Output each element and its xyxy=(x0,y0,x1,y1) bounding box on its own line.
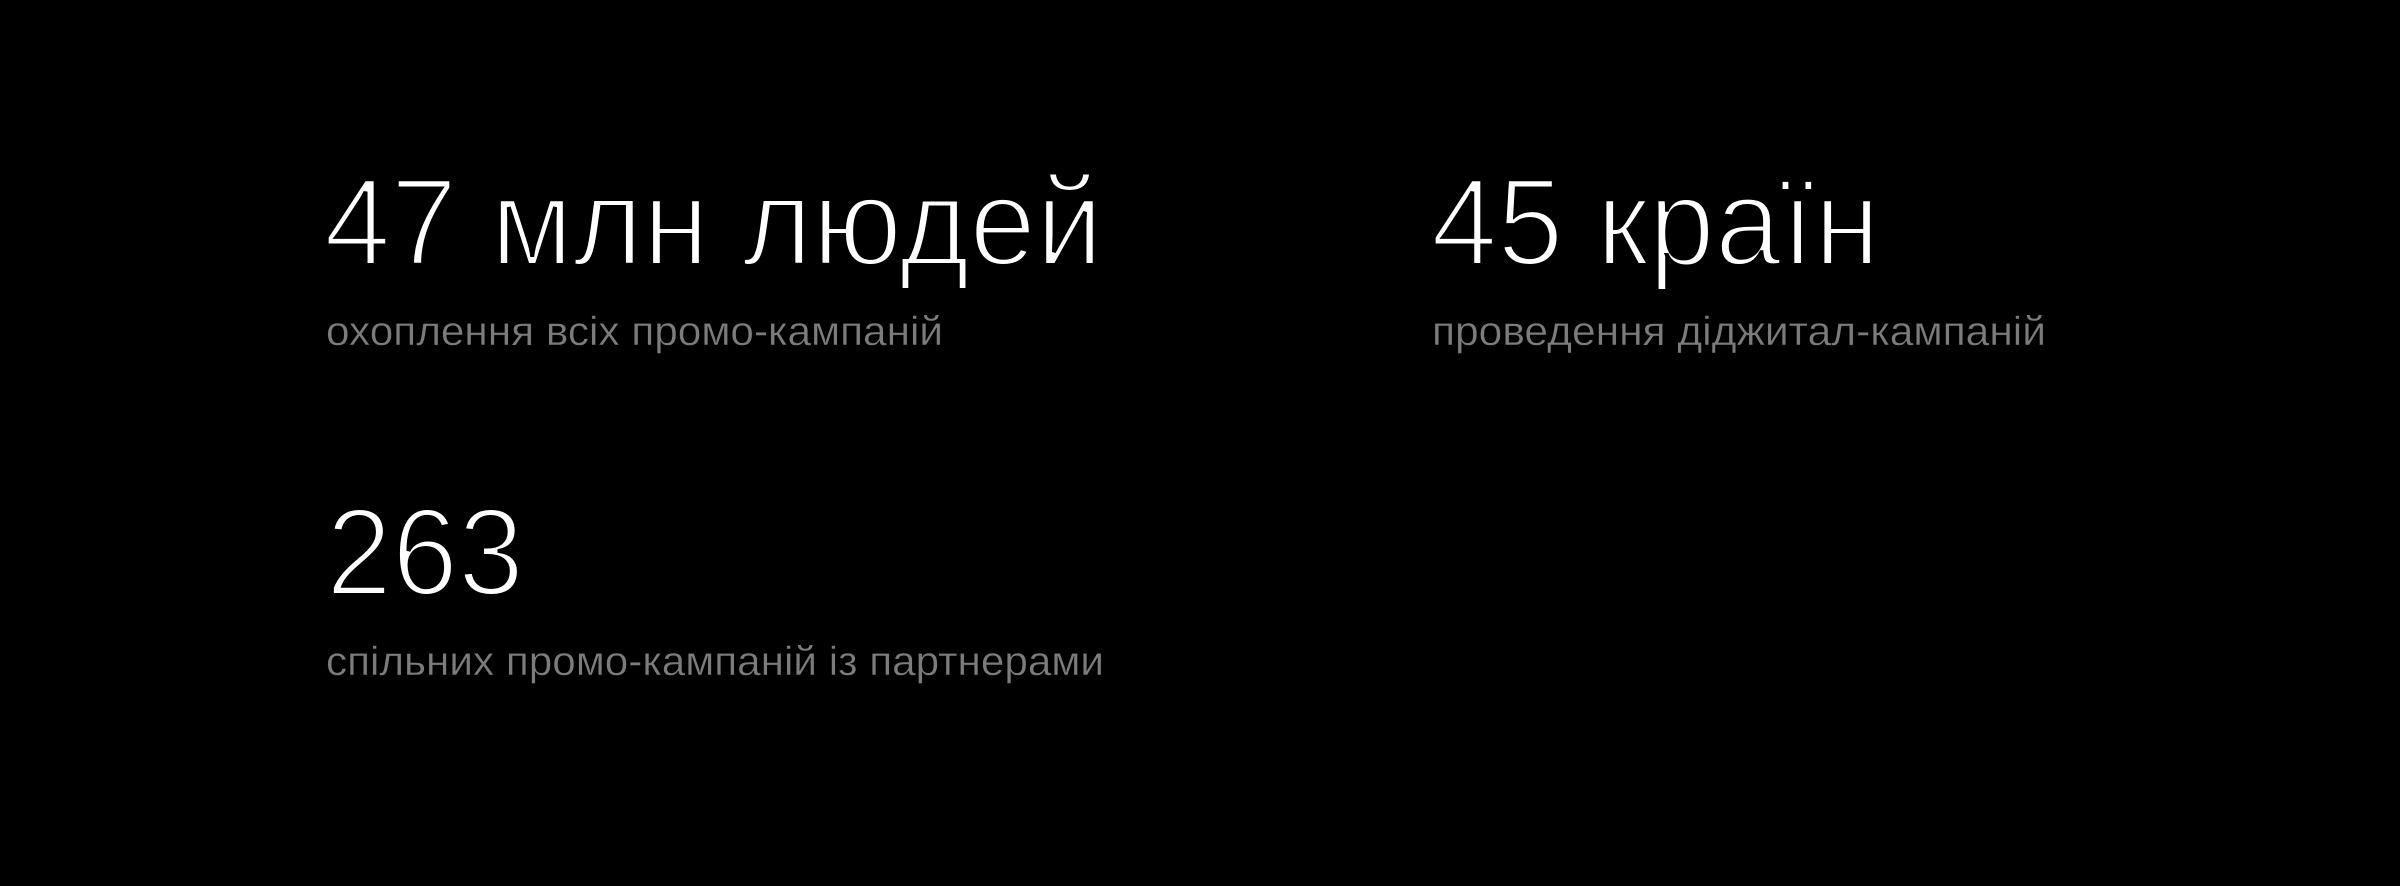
stat: 263 joint campaigns xyxy=(326,484,1104,684)
stat: 45 countries xyxy=(1431,154,2046,354)
number: 263: 263 xyxy=(326,484,524,622)
caption: joint promo campaigns with partners: спільних промо-кампаній із партнерами xyxy=(326,638,1104,684)
number: 45 країн: 45 країн xyxy=(1431,154,1880,292)
number: 47 млн людей: 47 млн людей xyxy=(324,154,1103,292)
stat: 47 million people xyxy=(324,154,1103,354)
caption: reach of all promo campaigns: охоплення всіх промо-кампаній xyxy=(326,308,943,354)
caption: digital campaigns: проведення діджитал-кампаній xyxy=(1432,308,2046,354)
